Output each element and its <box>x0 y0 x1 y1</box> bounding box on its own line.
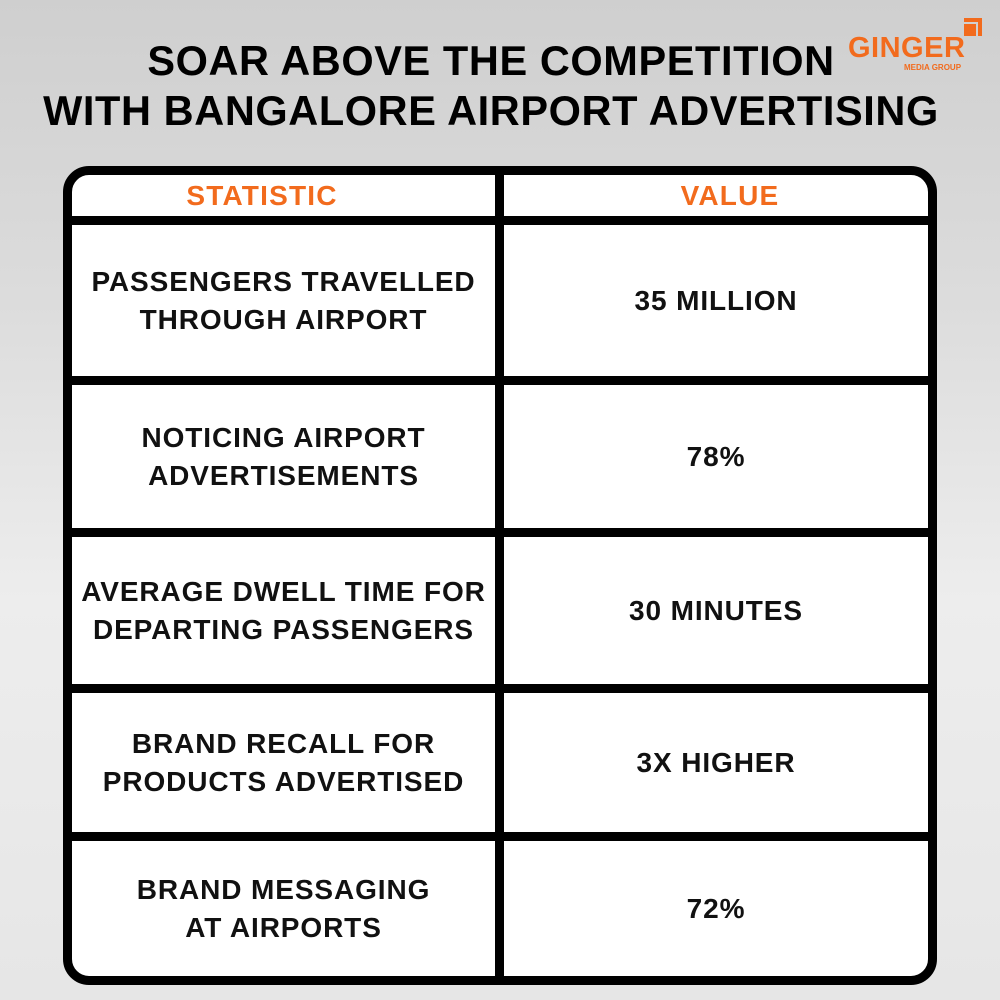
title <box>43 37 939 134</box>
table: 78% <box>687 440 745 472</box>
logo <box>848 18 982 72</box>
row 2: ADVERTISEMENTS <box>148 460 419 490</box>
row 1: PASSENGERS TRAVELLED <box>91 266 476 296</box>
title: WITH BANGALORE AIRPORT ADVERTISING <box>43 87 939 134</box>
row 5: AT AIRPORTS <box>185 912 382 942</box>
row 1 <box>91 266 476 334</box>
table <box>63 166 937 985</box>
row 3: DEPARTING PASSENGERS <box>93 614 474 644</box>
logo: MEDIA GROUP <box>904 63 961 72</box>
row 5: BRAND MESSAGING <box>137 874 430 904</box>
row 3 <box>81 576 486 644</box>
logo text: GINGER <box>848 32 965 64</box>
row 5 <box>137 874 430 942</box>
table: 72% <box>687 892 745 924</box>
icon: logo squares <box>964 18 982 36</box>
row 4 <box>103 728 464 796</box>
table: 3X HIGHER <box>636 746 796 778</box>
header: statistic: STATISTIC <box>186 180 338 210</box>
row 3: AVERAGE DWELL TIME FOR <box>81 576 486 606</box>
table: 30 MINUTES <box>629 594 803 626</box>
row 4: BRAND RECALL FOR <box>132 728 435 758</box>
row 2 <box>141 422 426 490</box>
header: value: VALUE <box>681 180 779 210</box>
row 4: PRODUCTS ADVERTISED <box>103 766 464 796</box>
row 1: THROUGH AIRPORT <box>140 304 427 334</box>
table: 35 MILLION <box>634 284 798 316</box>
row 2: NOTICING AIRPORT <box>141 422 426 452</box>
title: SOAR ABOVE THE COMPETITION <box>147 37 835 84</box>
